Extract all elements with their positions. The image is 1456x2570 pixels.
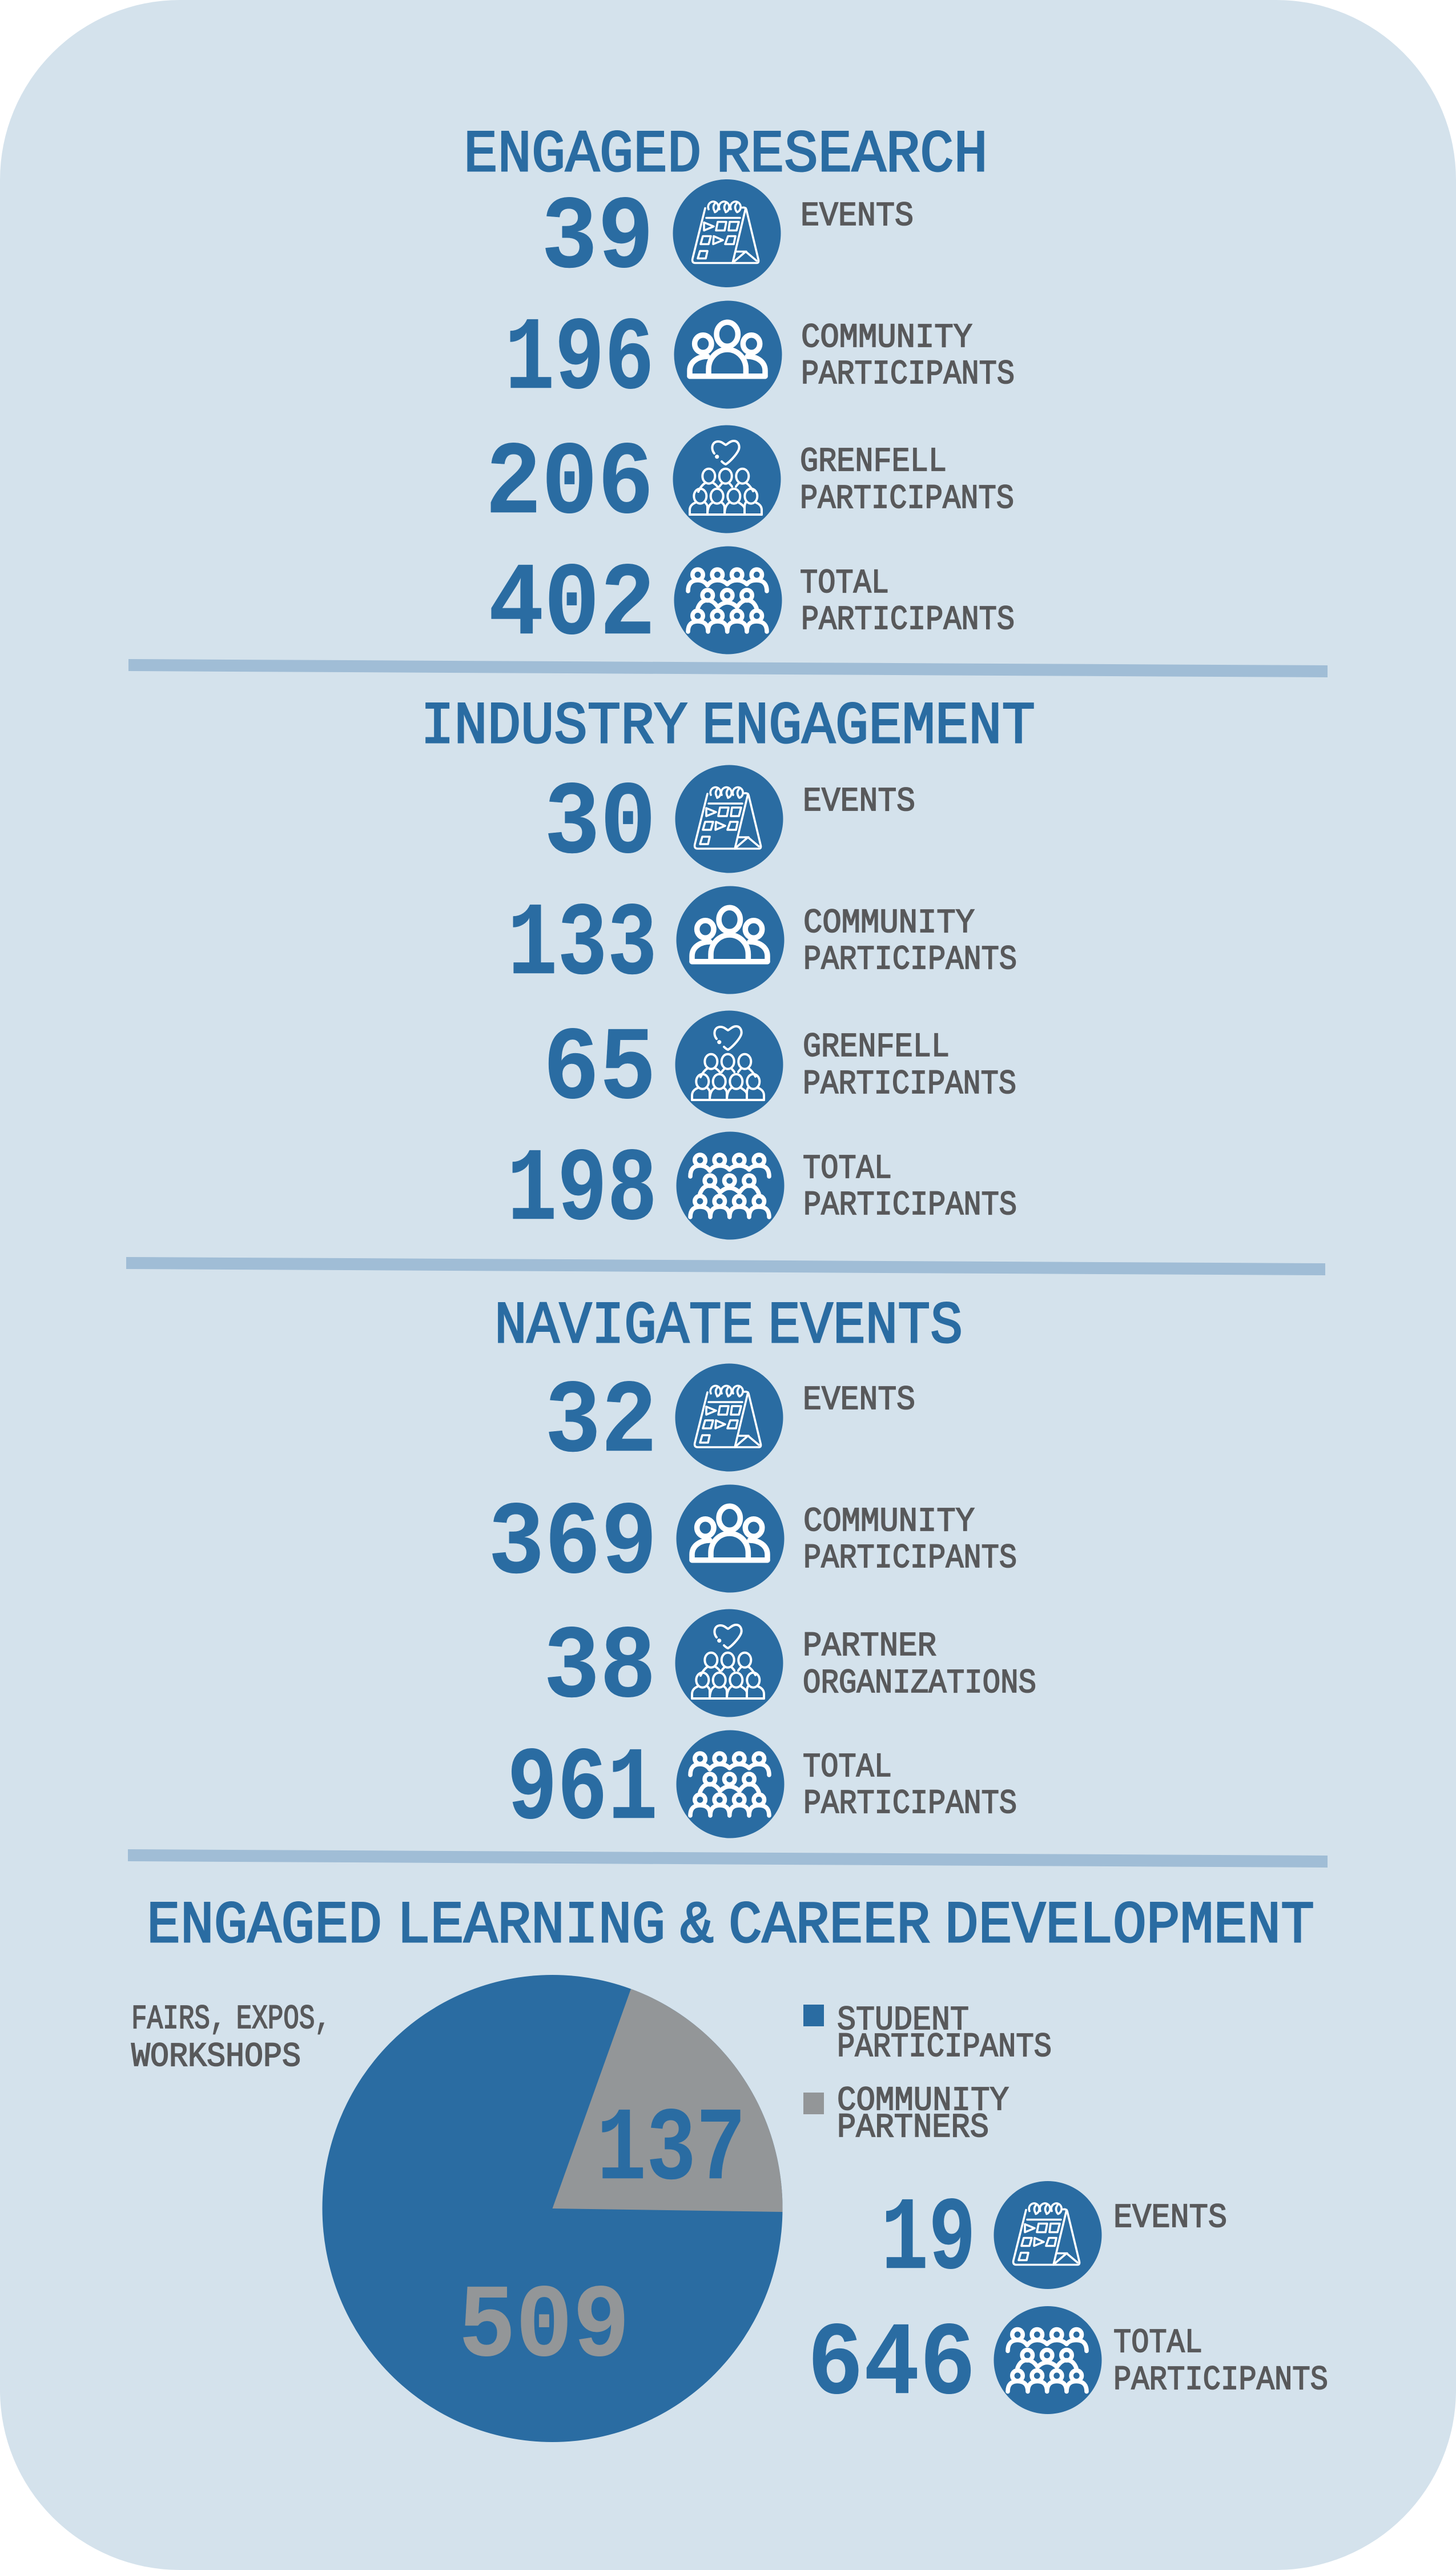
row: total participants: PARTICIPANTS <box>801 601 1015 639</box>
panel: industry engagement <box>421 693 1035 1250</box>
icon: calendar <box>675 1364 783 1471</box>
heading: engaged research: ENGAGED RESEARCH <box>464 122 988 189</box>
icon: crowd <box>676 1730 785 1838</box>
row: community participants: PARTICIPANTS <box>801 355 1015 393</box>
number: 30: 30 <box>544 765 656 884</box>
number: 65: 65 <box>543 1011 656 1129</box>
label: total participants: TOTAL <box>1113 2324 1202 2362</box>
row: events <box>545 1364 915 1482</box>
number: 32: 32 <box>545 1364 657 1482</box>
label: community participants: COMMUNITY <box>803 904 975 942</box>
note: fairs, expos, workshops <box>131 2000 331 2076</box>
legend: community partners: PARTNERS <box>837 2109 989 2147</box>
number: 39: 39 <box>541 180 654 298</box>
label: total participants: TOTAL <box>803 1748 892 1786</box>
panel: navigate events <box>488 1293 1036 1849</box>
row: partner organizations <box>544 1609 1036 1728</box>
heading: engaged learning and career development: ENGAGED LEARNING & CAREER DEVELOPMENT <box>147 1893 1314 1960</box>
label: events: EVENTS <box>803 782 915 821</box>
number: 196: 196 <box>505 301 654 419</box>
label: total participants: TOTAL <box>800 564 889 603</box>
number: 961: 961 <box>507 1731 658 1849</box>
number: 369: 369 <box>488 1485 657 1604</box>
row: events <box>541 179 914 298</box>
note: fairs, expos, workshops: WORKSHOPS <box>131 2038 301 2076</box>
heading: navigate events: NAVIGATE EVENTS <box>494 1293 963 1360</box>
icon: community group <box>676 886 785 994</box>
panel: engaged research <box>464 122 1015 665</box>
label: grenfell participants: GRENFELL <box>803 1028 950 1066</box>
row: grenfell participants: PARTICIPANTS <box>800 480 1014 518</box>
icon: audience with heart <box>675 1609 783 1717</box>
icon: community group <box>676 1485 785 1592</box>
icon: crowd <box>674 546 782 654</box>
row: partner organizations: ORGANIZATIONS <box>803 1664 1036 1702</box>
legend: student participants: PARTICIPANTS <box>837 2028 1052 2066</box>
row: community participants: PARTICIPANTS <box>803 1539 1017 1577</box>
label: community participants: COMMUNITY <box>801 319 972 357</box>
row: events <box>881 2181 1227 2299</box>
value: 137: 137 <box>597 2091 746 2210</box>
row: community participants <box>488 1485 1017 1604</box>
icon: crowd <box>676 1132 785 1239</box>
legend: student participants: STUDENT <box>837 2001 969 2039</box>
row: grenfell participants <box>485 425 1014 544</box>
number: 206: 206 <box>485 425 654 544</box>
heading: industry engagement: INDUSTRY ENGAGEMENT <box>421 693 1035 761</box>
row: grenfell participants <box>543 1011 1016 1129</box>
label: community participants: COMMUNITY <box>803 1503 975 1541</box>
panel: engaged learning and career development <box>131 1893 1328 2442</box>
row: total participants: PARTICIPANTS <box>803 1186 1017 1224</box>
icon: audience with heart <box>673 425 781 533</box>
legend: community partners: COMMUNITY <box>837 2082 1009 2120</box>
row: total participants: PARTICIPANTS <box>1113 2361 1328 2399</box>
row: community participants <box>505 300 1015 419</box>
label: events: EVENTS <box>803 1381 915 1419</box>
number: 133: 133 <box>508 886 657 1005</box>
row: events <box>544 765 915 884</box>
row: total participants <box>488 546 1015 665</box>
legend: student participants <box>803 2001 1052 2066</box>
icon: calendar <box>675 765 783 873</box>
label: total participants: TOTAL <box>803 1150 892 1188</box>
value: 509: 509 <box>458 2268 630 2387</box>
note: fairs, expos, workshops: FAIRS, EXPOS, <box>131 2000 331 2038</box>
row: community participants: PARTICIPANTS <box>803 941 1017 979</box>
row: total participants <box>807 2306 1328 2424</box>
label: events: EVENTS <box>1113 2199 1227 2237</box>
icon: crowd <box>994 2306 1102 2414</box>
number: 38: 38 <box>544 1609 656 1728</box>
number: 19: 19 <box>881 2181 976 2299</box>
icon: calendar <box>673 179 781 287</box>
row: total participants <box>507 1132 1017 1250</box>
label: grenfell participants: GRENFELL <box>800 443 947 481</box>
row: community participants <box>508 886 1017 1005</box>
row: grenfell participants: PARTICIPANTS <box>803 1065 1016 1103</box>
number: 402: 402 <box>488 547 655 665</box>
pie chart <box>322 1975 783 2442</box>
icon: audience with heart <box>675 1011 783 1118</box>
label: partner organizations: PARTNER <box>803 1627 936 1665</box>
number: 198: 198 <box>507 1132 657 1250</box>
row: total participants <box>507 1730 1017 1849</box>
number: 646: 646 <box>807 2306 976 2424</box>
legend: community partners <box>803 2082 1009 2147</box>
row: total participants: PARTICIPANTS <box>803 1785 1017 1823</box>
icon: community group <box>674 300 782 409</box>
label: events: EVENTS <box>801 197 914 235</box>
icon: calendar <box>994 2181 1102 2289</box>
